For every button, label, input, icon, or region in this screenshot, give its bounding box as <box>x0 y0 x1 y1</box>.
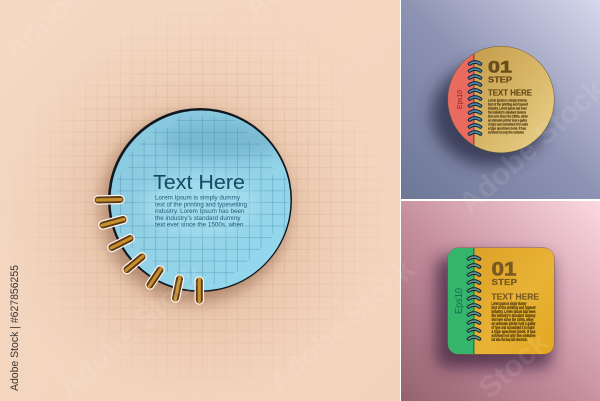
text block: lorem ipsum: text ever since the 1500s, when <box>155 222 244 229</box>
text block: small lorem: Lorem Ipsum is simply dummy <box>492 301 527 306</box>
text block: small lorem: text of the printing and typeset <box>488 102 528 106</box>
red spine <box>448 54 474 145</box>
panel: square notebook card <box>448 248 554 354</box>
text block: small lorem: survived not only five centuries <box>492 333 536 338</box>
number: 01: 01 <box>492 260 517 281</box>
number: 01: 01 <box>488 59 512 77</box>
label: Eps10: Eps10 <box>454 288 465 314</box>
icon: teal spiral binding on square card <box>468 257 480 339</box>
text block: small lorem: Lorem Ipsum is simply dummy <box>488 98 528 102</box>
text block: small lorem: text ever since the 1500s, when <box>492 317 534 322</box>
panel: pink background <box>401 201 600 401</box>
text block: small lorem: the industry's standard dummy <box>488 110 526 114</box>
text block: small lorem: a type specimen book. It has <box>492 329 536 334</box>
text block: small lorem: an unknown printer took a galley <box>488 118 527 122</box>
label: STEP: STEP <box>488 75 512 84</box>
heading: TEXT HERE: TEXT HERE <box>492 291 539 301</box>
heading: Text Here: Text Here <box>153 172 245 194</box>
text block: lorem ipsum: Lorem Ipsum is simply dummy <box>155 194 241 202</box>
label: Eps10: Eps10 <box>455 90 464 109</box>
background grid pattern <box>35 27 378 369</box>
heading: TEXT HERE: TEXT HERE <box>488 89 532 98</box>
text block: small lorem: but also the leap into electronic <box>492 337 528 342</box>
text block: lorem ipsum: the industry's standard dummy <box>155 215 241 222</box>
watermark: Adobe Stock: Adobe Stock <box>263 253 421 400</box>
panel: blue-grey background <box>401 0 600 199</box>
panel: peach background <box>0 0 400 401</box>
text block: small lorem: text ever since the 1500s, when <box>488 114 528 118</box>
side credit: Adobe Stock | #627856255 <box>9 265 21 391</box>
text block: small lorem: industry. Lorem Ipsum has been <box>488 106 527 110</box>
text block: small lorem: a type specimen book. It has <box>488 126 527 130</box>
text block: lorem ipsum <box>155 194 247 229</box>
icon: stitched laces on main circle <box>97 200 199 302</box>
green spine <box>448 248 474 354</box>
text block: small lorem: an unknown printer took a galley <box>492 321 536 326</box>
panel: round notebook card <box>447 46 555 154</box>
watermark: Adobe Stock: Adobe Stock <box>53 258 211 401</box>
icon: blue spiral binding on round card <box>470 62 480 134</box>
text block: lorem ipsum: industry. Lorem Ipsum has been <box>155 208 245 215</box>
text block: small lorem: of type and scrambled it to make <box>488 122 528 126</box>
text block: small lorem: survived not only five centuries <box>488 130 524 134</box>
label: STEP: STEP <box>492 277 517 287</box>
text block: small lorem: of type and scrambled it to make <box>492 325 535 330</box>
text block: small lorem: text of the printing and typeset <box>492 305 536 310</box>
text block: small lorem <box>488 98 528 134</box>
panel: main blue notebook circle <box>101 108 292 302</box>
text block: small lorem: industry. Lorem Ipsum has been <box>492 309 536 314</box>
text block: lorem ipsum: text of the printing and typesetting <box>155 201 247 208</box>
text block: small lorem <box>492 301 536 342</box>
text block: small lorem: the industry's standard dummy <box>492 313 536 318</box>
